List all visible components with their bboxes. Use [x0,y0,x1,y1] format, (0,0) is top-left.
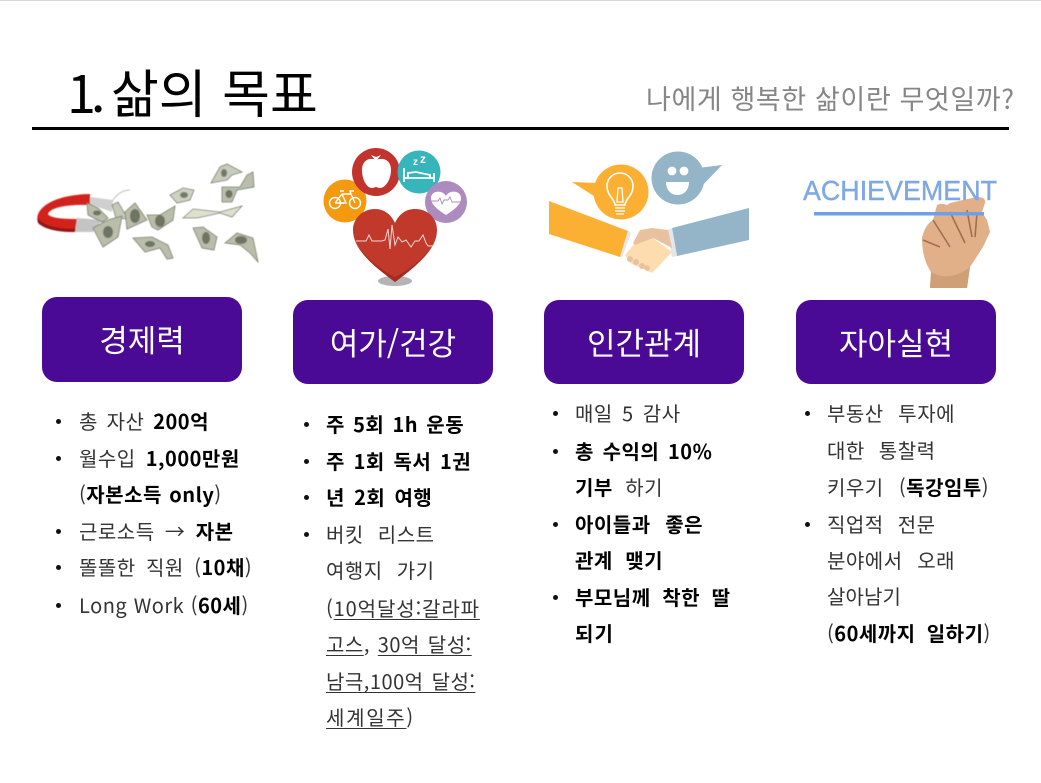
text block: 여가/건강 list: 주 1회 독서 1권 [326,446,471,475]
text block: 자아실현 list: 키우기 (독강임투) [827,472,989,501]
text block: 경제력 list: 월수입 1,000만원 [79,443,240,472]
icon: hands [625,238,672,273]
panel: 인간관계 heading [544,300,744,384]
achievement word: ACHIEVEMENT [803,175,997,206]
panel: 경제력 heading: 경제력 [99,316,185,361]
icon: magnet attracting money [36,163,260,264]
text block: 여가/건강 list [304,409,480,731]
text block: 경제력 list [56,406,252,619]
panel: 여가/건강 heading [293,300,493,384]
text block: 자아실현 list [805,398,991,647]
text block: 경제력 list: 총 자산 200억 [79,406,209,435]
panel: 자아실현 heading [796,300,996,384]
icon: sleep circle: z [413,157,418,168]
icon: apple circle [352,148,400,196]
text block: 여가/건강 list: 주 5회 1h 운동 [326,409,464,438]
icon: sleep circle: z [420,152,426,166]
icon: sleep circle [398,150,440,194]
text block: 여가/건강 list: (10억달성:갈라파 [326,593,480,622]
text block: 경제력 list: Long Work (60세) [79,590,249,619]
icon: achievement handwriting [802,175,997,288]
text block: 인간관계 list: 총 수익의 10% [575,436,712,465]
icon: shadow [378,276,412,286]
text block: 자아실현 list: (60세까지 일하기) [827,618,991,647]
icon: orange arm [549,201,628,257]
icon: bicycle circle [324,180,366,222]
text block: 여가/건강 list: 세계일주) [326,702,415,731]
text block: 자아실현 list: 직업적 전문 [827,509,936,538]
icon: handshake with speech bubbles [549,152,749,273]
underline stroke [814,212,984,216]
text block: 인간관계 list [553,398,730,647]
panel: 자아실현 heading: 자아실현 [839,319,953,364]
subtitle: 나에게 행복한 삶이란 무엇일까? [646,78,1015,117]
text block: 자아실현 list: 살아남기 [827,581,901,610]
panel: 인간관계 heading: 인간관계 [587,319,701,364]
text block: 자아실현 list: 대한 통찰력 [827,435,936,464]
text block: 자아실현 list: 분야에서 오래 [827,545,955,574]
text block: 경제력 list: (자본소득 only) [79,479,222,508]
text block: 여가/건강 list: 버킷 리스트 [326,519,434,548]
text block: 인간관계 list: 아이들과 좋은 [575,509,703,538]
icon: light bulb bubble [572,164,648,220]
text block: 인간관계 list: 부모님께 착한 딸 [575,582,730,611]
icon: blue arm [672,208,749,256]
icon: health and leisure [324,148,467,286]
hand [922,197,990,288]
text block: 인간관계 list: 기부 하기 [575,472,663,501]
icon: heartbeat circle [425,181,467,223]
text block: 경제력 list: 똘똘한 직원 (10채) [79,552,252,581]
text block: 여가/건강 list: 남극,100억 달성: [326,666,475,695]
title: 1. 삶의 목표 [67,53,318,128]
text block: 인간관계 list: 매일 5 감사 [575,398,681,427]
icon: big heart [353,209,437,282]
text block: 여가/건강 list: 년 2회 여행 [326,482,432,511]
panel: 여가/건강 heading: 여가/건강 [330,319,456,364]
panel: 경제력 heading [42,297,242,382]
text block: 여가/건강 list: 고스, 30억 달성: [326,629,472,658]
text block: 여가/건강 list: 여행지 가기 [326,555,434,584]
text block: 인간관계 list: 관계 맺기 [575,545,663,574]
heading rule [32,127,1009,130]
icon: smiley bubble [652,152,722,204]
text block: 경제력 list: 근로소득 → 자본 [79,516,234,545]
text block: 인간관계 list: 되기 [575,618,614,647]
text block: 자아실현 list: 부동산 투자에 [827,398,955,427]
